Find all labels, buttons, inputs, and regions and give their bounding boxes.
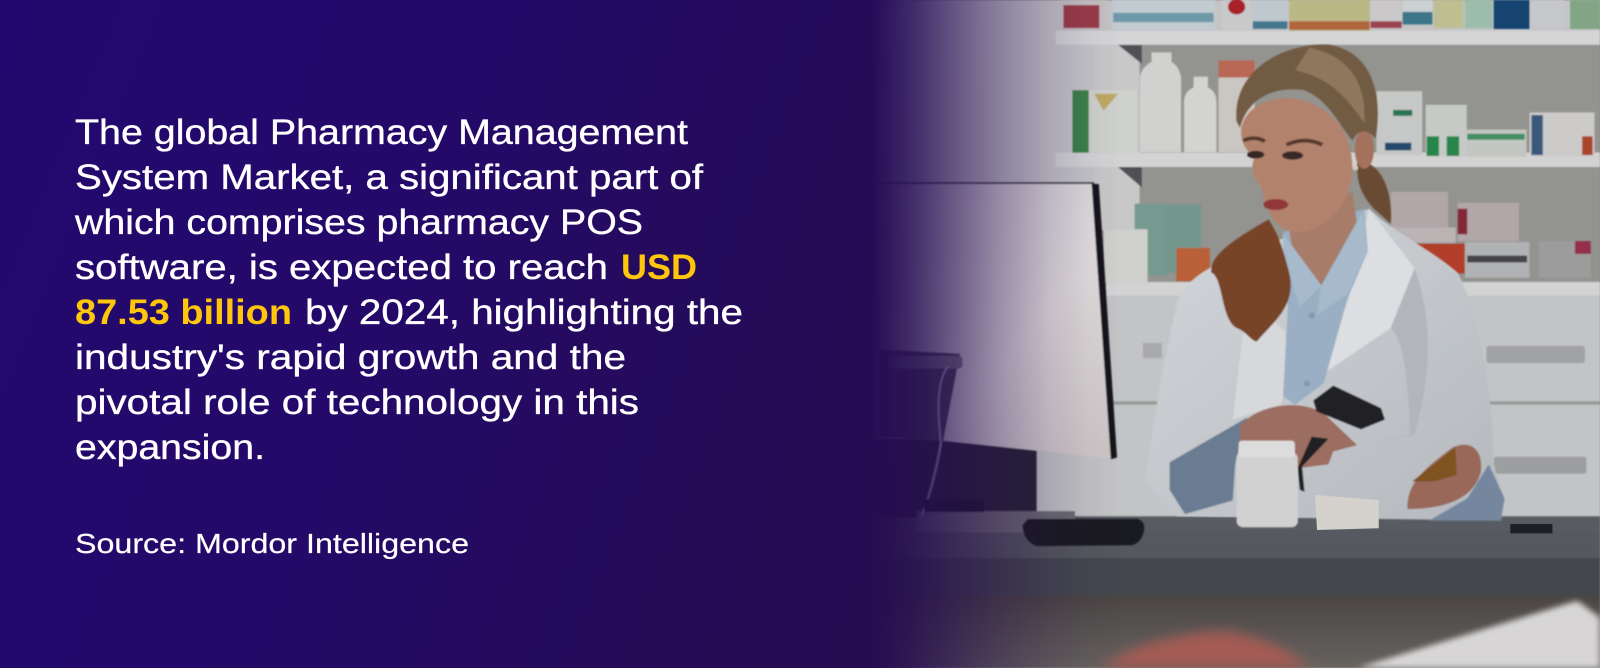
right sleeve: [1429, 464, 1505, 521]
counter and desk: [850, 516, 1600, 668]
top shelf products: [1061, 0, 1600, 31]
eyes and brows: [1243, 138, 1322, 145]
paragraph: market statistic: which comprises pharmacy POS: [74, 203, 643, 242]
purple gradient panel fading into photo: [0, 0, 1092, 668]
white pill bottle: [1237, 440, 1298, 527]
lower shelf products: [1104, 192, 1591, 284]
neck: [1288, 192, 1361, 285]
hand with pill bottle: [1407, 445, 1481, 509]
white carton: [1315, 495, 1379, 530]
paragraph: market statistic: industry's rapid growth and the: [75, 338, 626, 377]
blurred foreground objects: [1099, 601, 1600, 668]
ponytail: [1357, 162, 1391, 224]
lips: [1263, 199, 1288, 210]
left sleeve: [1170, 417, 1247, 514]
lab coat: [1145, 209, 1503, 521]
paragraph: market statistic: [74, 113, 743, 467]
paragraph: market statistic: The global Pharmacy Management: [75, 113, 688, 152]
shirt: [1283, 209, 1368, 405]
paragraph: market statistic: expansion.: [75, 428, 265, 467]
source line: Source: Mordor Intelligence: [75, 528, 469, 559]
paragraph: market statistic: by 2024, highlighting the: [305, 293, 743, 332]
hair top: [1236, 45, 1378, 141]
card terminal: [1022, 519, 1144, 546]
paragraph: market statistic: pivotal role of technology in this: [75, 383, 639, 422]
wall and shelving: [850, 0, 1600, 668]
shirt collar: [1283, 211, 1367, 315]
pharmacist figure: [1145, 45, 1505, 521]
face: [1241, 98, 1352, 232]
paragraph: market statistic: System Market, a significant part of: [75, 158, 703, 197]
paragraph: market statistic: software, is expected to reach: [75, 248, 608, 287]
highlight: 87.53 billion: 87.53 billion: [75, 293, 292, 332]
blister pack: [1510, 524, 1552, 533]
barcode scanner: [1297, 386, 1385, 492]
ear: [1355, 130, 1374, 169]
highlight: USD: USD: [621, 248, 697, 287]
photo dimming: [850, 0, 1600, 668]
middle shelf products: [1073, 52, 1595, 157]
computer monitor: [850, 182, 1144, 546]
hand with scanner: [1240, 405, 1357, 469]
hair over shoulder: [1211, 219, 1291, 342]
